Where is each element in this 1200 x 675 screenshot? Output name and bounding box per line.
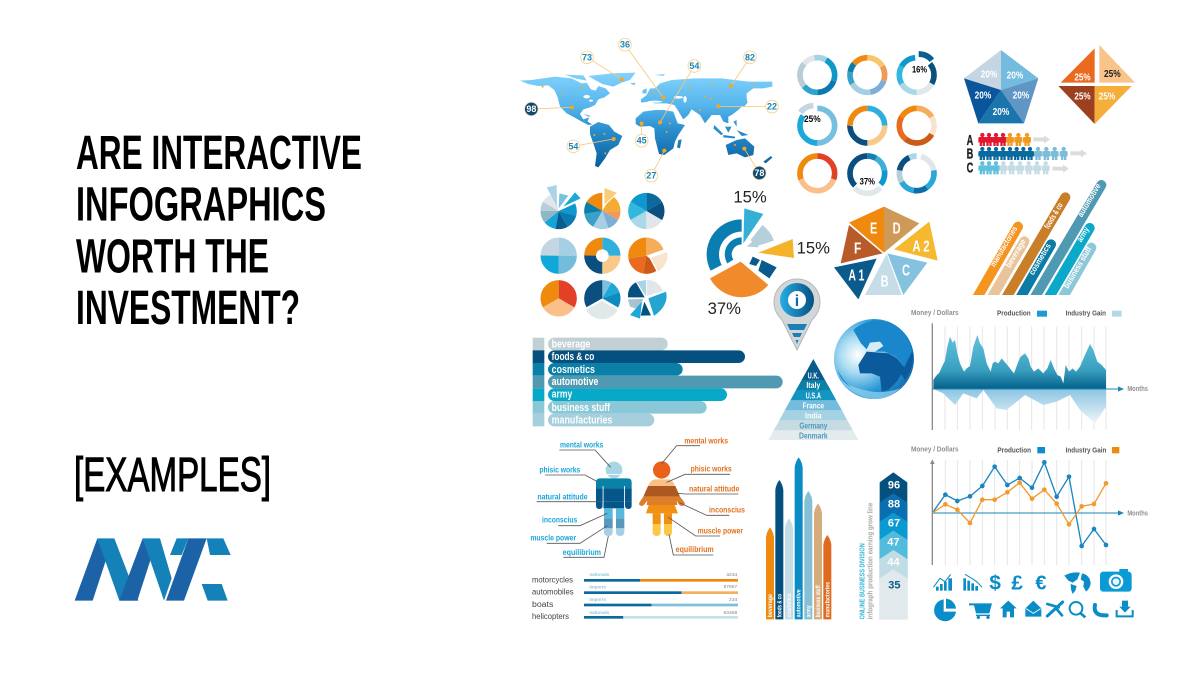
big exploded pie chart: 15% [797, 238, 830, 257]
transport progress bars: nationals [589, 572, 610, 578]
pie 6 [637, 247, 668, 273]
transport progress bars [532, 572, 738, 621]
rocket bar chart: foods & co [776, 594, 783, 617]
area chart legend: Money / Dollars [911, 308, 959, 317]
line chart: Months [1127, 509, 1148, 518]
female labels: natural attitude [689, 484, 740, 493]
rocket bar chart: cosmetics [786, 593, 793, 617]
line chart legend: Money / Dollars [911, 445, 959, 454]
diagonal capsule bars: automotive [1075, 181, 1103, 219]
rocket bar chart: beverage [767, 594, 774, 617]
icon: download [1116, 601, 1134, 617]
hexagon letter diagram: C [902, 263, 910, 280]
pentagon percent chart [964, 50, 1038, 123]
transport progress bars: 234 [729, 597, 738, 603]
icon: search [1070, 602, 1085, 617]
people pictogram rows: C [967, 161, 974, 177]
donut 4 with 25%: 25% [804, 114, 821, 124]
pie 8 [593, 289, 611, 310]
chart side captions: infograph production earning grow line [866, 503, 875, 619]
female labels: phisic works [691, 465, 732, 474]
pie 5 [593, 247, 611, 265]
transport progress bars: 87657 [723, 584, 738, 590]
diagonal capsule bars [970, 181, 1103, 310]
male labels: inconscius [542, 516, 578, 525]
world map [520, 38, 778, 182]
male labels [530, 440, 604, 557]
pyramid of countries: Italy [806, 380, 821, 390]
map value badges: 54 [689, 61, 699, 71]
map value badges: 36 [620, 40, 630, 50]
map value badges: 82 [745, 52, 755, 62]
rocket bar chart: automotive [796, 589, 803, 617]
line chart legend: Production [997, 445, 1031, 454]
diamond percent chart: 25% [1104, 69, 1121, 80]
donut 3 with 16%: 16% [912, 65, 928, 75]
map value badges: 22 [767, 102, 777, 112]
female body [639, 461, 685, 536]
male body [596, 462, 632, 536]
rocket bar chart [766, 457, 831, 619]
logo [75, 538, 231, 601]
icon: camera [1100, 569, 1132, 592]
people pictogram rows [967, 133, 1087, 177]
male labels: phisic works [539, 466, 581, 475]
icon: dollar: $ [989, 571, 1001, 594]
area chart legend: Industry Gain [1066, 309, 1106, 318]
icon: euro: € [1035, 572, 1046, 594]
male labels: mental works [560, 440, 604, 449]
icon: mail [1025, 601, 1041, 617]
chevron stack chart: 96 [888, 479, 900, 491]
hexagon letter diagram: B [881, 274, 889, 291]
pie 3 [637, 202, 655, 220]
male leader lines [537, 450, 611, 557]
map value badges: 54 [568, 141, 578, 151]
area chart: Months [1127, 384, 1148, 393]
pentagon percent chart: 20% [1013, 91, 1029, 102]
female labels: mental works [684, 436, 728, 445]
transport progress bars: motorcycles [532, 575, 573, 584]
title: ARE INTERACTIVE [76, 127, 362, 180]
chart side captions: ONLINE BUSINESS DIVISION [857, 543, 866, 619]
female labels: inconscius [709, 505, 745, 514]
diagonal capsule bars: manufactories [988, 224, 1020, 268]
pie 4 [550, 247, 568, 265]
diamond percent chart [1058, 45, 1135, 124]
map value badges: 45 [637, 136, 647, 146]
diamond percent chart: 25% [1099, 91, 1115, 102]
icon set [933, 569, 1134, 621]
transport progress bars: boats [532, 600, 553, 609]
inland seas [583, 95, 687, 103]
male labels: muscle power [530, 534, 576, 543]
transport progress bars: automobiles [532, 587, 574, 596]
male labels: equilibrium [563, 548, 601, 557]
icon: rising chart [933, 574, 952, 591]
horizontal bar list: cosmetics [552, 364, 595, 376]
diagonal capsule bars: army [1074, 225, 1091, 244]
transport progress bars: imports [589, 597, 606, 603]
area chart [911, 308, 1148, 430]
pentagon percent chart: 20% [1007, 70, 1023, 81]
pyramid of countries: U.K. [808, 370, 819, 380]
diagonal capsule bars: cosmetics [1026, 241, 1053, 277]
transport progress bars: 63458 [723, 610, 738, 616]
chevron stack chart: 88 [888, 499, 900, 511]
diagonal capsule bars: business stuff [1061, 245, 1093, 290]
donut 8 with 37%: 37% [860, 177, 876, 187]
pie 7 [550, 289, 568, 307]
female leader lines [661, 446, 738, 555]
donut charts [797, 54, 936, 193]
pie 1 [547, 185, 581, 220]
icon: pie [934, 599, 956, 621]
transport progress bars: 4234 [726, 572, 738, 578]
diagonal capsule bars: beverage [1003, 237, 1028, 269]
icon: cart [969, 603, 992, 619]
diamond percent chart: 25% [1074, 73, 1091, 84]
chart side captions [857, 503, 875, 619]
horizontal bar list: beverage [552, 339, 590, 351]
female figure diagram [639, 436, 745, 555]
map value badges: 27 [646, 171, 656, 181]
map value badges: 78 [754, 168, 764, 178]
big exploded pie chart: 15% [733, 188, 767, 207]
pyramid of countries: India [805, 410, 822, 420]
big exploded pie chart: 37% [708, 299, 741, 318]
pentagon percent chart: 20% [975, 90, 991, 101]
chevron stack chart: 47 [887, 537, 899, 549]
icon: phone [1095, 605, 1107, 615]
map markers [542, 77, 754, 154]
male figure diagram [530, 440, 632, 557]
pyramid of countries: Germany [799, 420, 828, 430]
donut 2 [850, 58, 885, 92]
donut 6 [899, 108, 934, 143]
diamond percent chart: 25% [1074, 91, 1091, 102]
pyramid of countries [768, 359, 858, 440]
info pin icon [774, 279, 820, 350]
pyramid of countries: Denmark [799, 430, 828, 440]
icon: home [1000, 601, 1017, 617]
hexagon letter diagram: A 2 [912, 239, 930, 256]
area chart legend: Production [997, 309, 1031, 318]
chevron stack chart [857, 472, 907, 619]
chevron stack chart: 44 [887, 557, 900, 569]
transport progress bars: nationals [589, 610, 610, 616]
rocket bar chart: manufactories [824, 582, 831, 617]
transport progress bars: helicopters [532, 612, 569, 621]
donut 7 [800, 156, 835, 191]
people pictogram rows: B [967, 147, 973, 163]
donut 9 [899, 156, 934, 191]
pentagon percent chart: 20% [993, 107, 1009, 118]
info pin icon: i [795, 293, 799, 310]
icon: world [1064, 572, 1091, 594]
chevron stack chart: 35 [888, 579, 900, 591]
line chart legend [911, 445, 1119, 454]
title: INFOGRAPHICS [76, 178, 326, 232]
pyramid of countries: U.S.A [806, 390, 821, 400]
female labels: muscle power [698, 527, 743, 536]
pie 2 [593, 187, 618, 220]
title [76, 127, 362, 335]
male labels: natural attitude [537, 492, 588, 501]
diagonal capsule bars: foods & co [1042, 201, 1065, 230]
donut 5 [850, 108, 885, 143]
map value badges [525, 38, 778, 182]
donut 1 [797, 55, 837, 95]
icon: falling chart [963, 574, 982, 591]
pie 9 [628, 280, 667, 319]
big exploded pie chart [707, 188, 830, 318]
rocket bar chart: army [805, 605, 812, 617]
title: WORTH THE [76, 230, 269, 284]
hexagon letter diagram: E [870, 220, 877, 237]
area chart legend [911, 308, 1122, 318]
horizontal bar list: foods & co [552, 351, 595, 363]
icon: plane [1047, 602, 1063, 616]
rocket bar chart: business stuff [815, 585, 822, 617]
pie charts [547, 185, 668, 319]
map value badges: 73 [582, 52, 592, 62]
hexagon letter diagram: D [893, 220, 901, 237]
chevron stack chart: 67 [888, 518, 900, 530]
hexagon letter diagram [834, 207, 938, 299]
icon: pound: £ [1011, 571, 1023, 594]
globe [834, 319, 914, 399]
hexagon letter diagram: F [854, 240, 861, 257]
leader lines [531, 45, 772, 176]
map value badges: 98 [526, 104, 536, 114]
female labels [676, 436, 745, 554]
line chart legend: Industry Gain [1066, 445, 1107, 454]
horizontal bar list: army [552, 389, 572, 401]
hexagon letter diagram: A 1 [848, 268, 865, 285]
transport progress bars: imports [589, 585, 606, 591]
horizontal bar list: automotive [552, 376, 598, 388]
pyramid of countries: France [803, 400, 824, 410]
line chart [911, 445, 1148, 565]
people pictogram rows: A [967, 133, 974, 149]
title: INVESTMENT? [76, 282, 300, 335]
female labels: equilibrium [676, 545, 714, 554]
horizontal bar list: business stuff [552, 402, 610, 414]
horizontal bar list [533, 338, 783, 427]
continents [520, 73, 772, 167]
subtitle: examples: [EXAMPLES] [74, 449, 271, 502]
pentagon percent chart: 20% [981, 70, 997, 81]
horizontal bar list: manufacturies [552, 415, 612, 427]
